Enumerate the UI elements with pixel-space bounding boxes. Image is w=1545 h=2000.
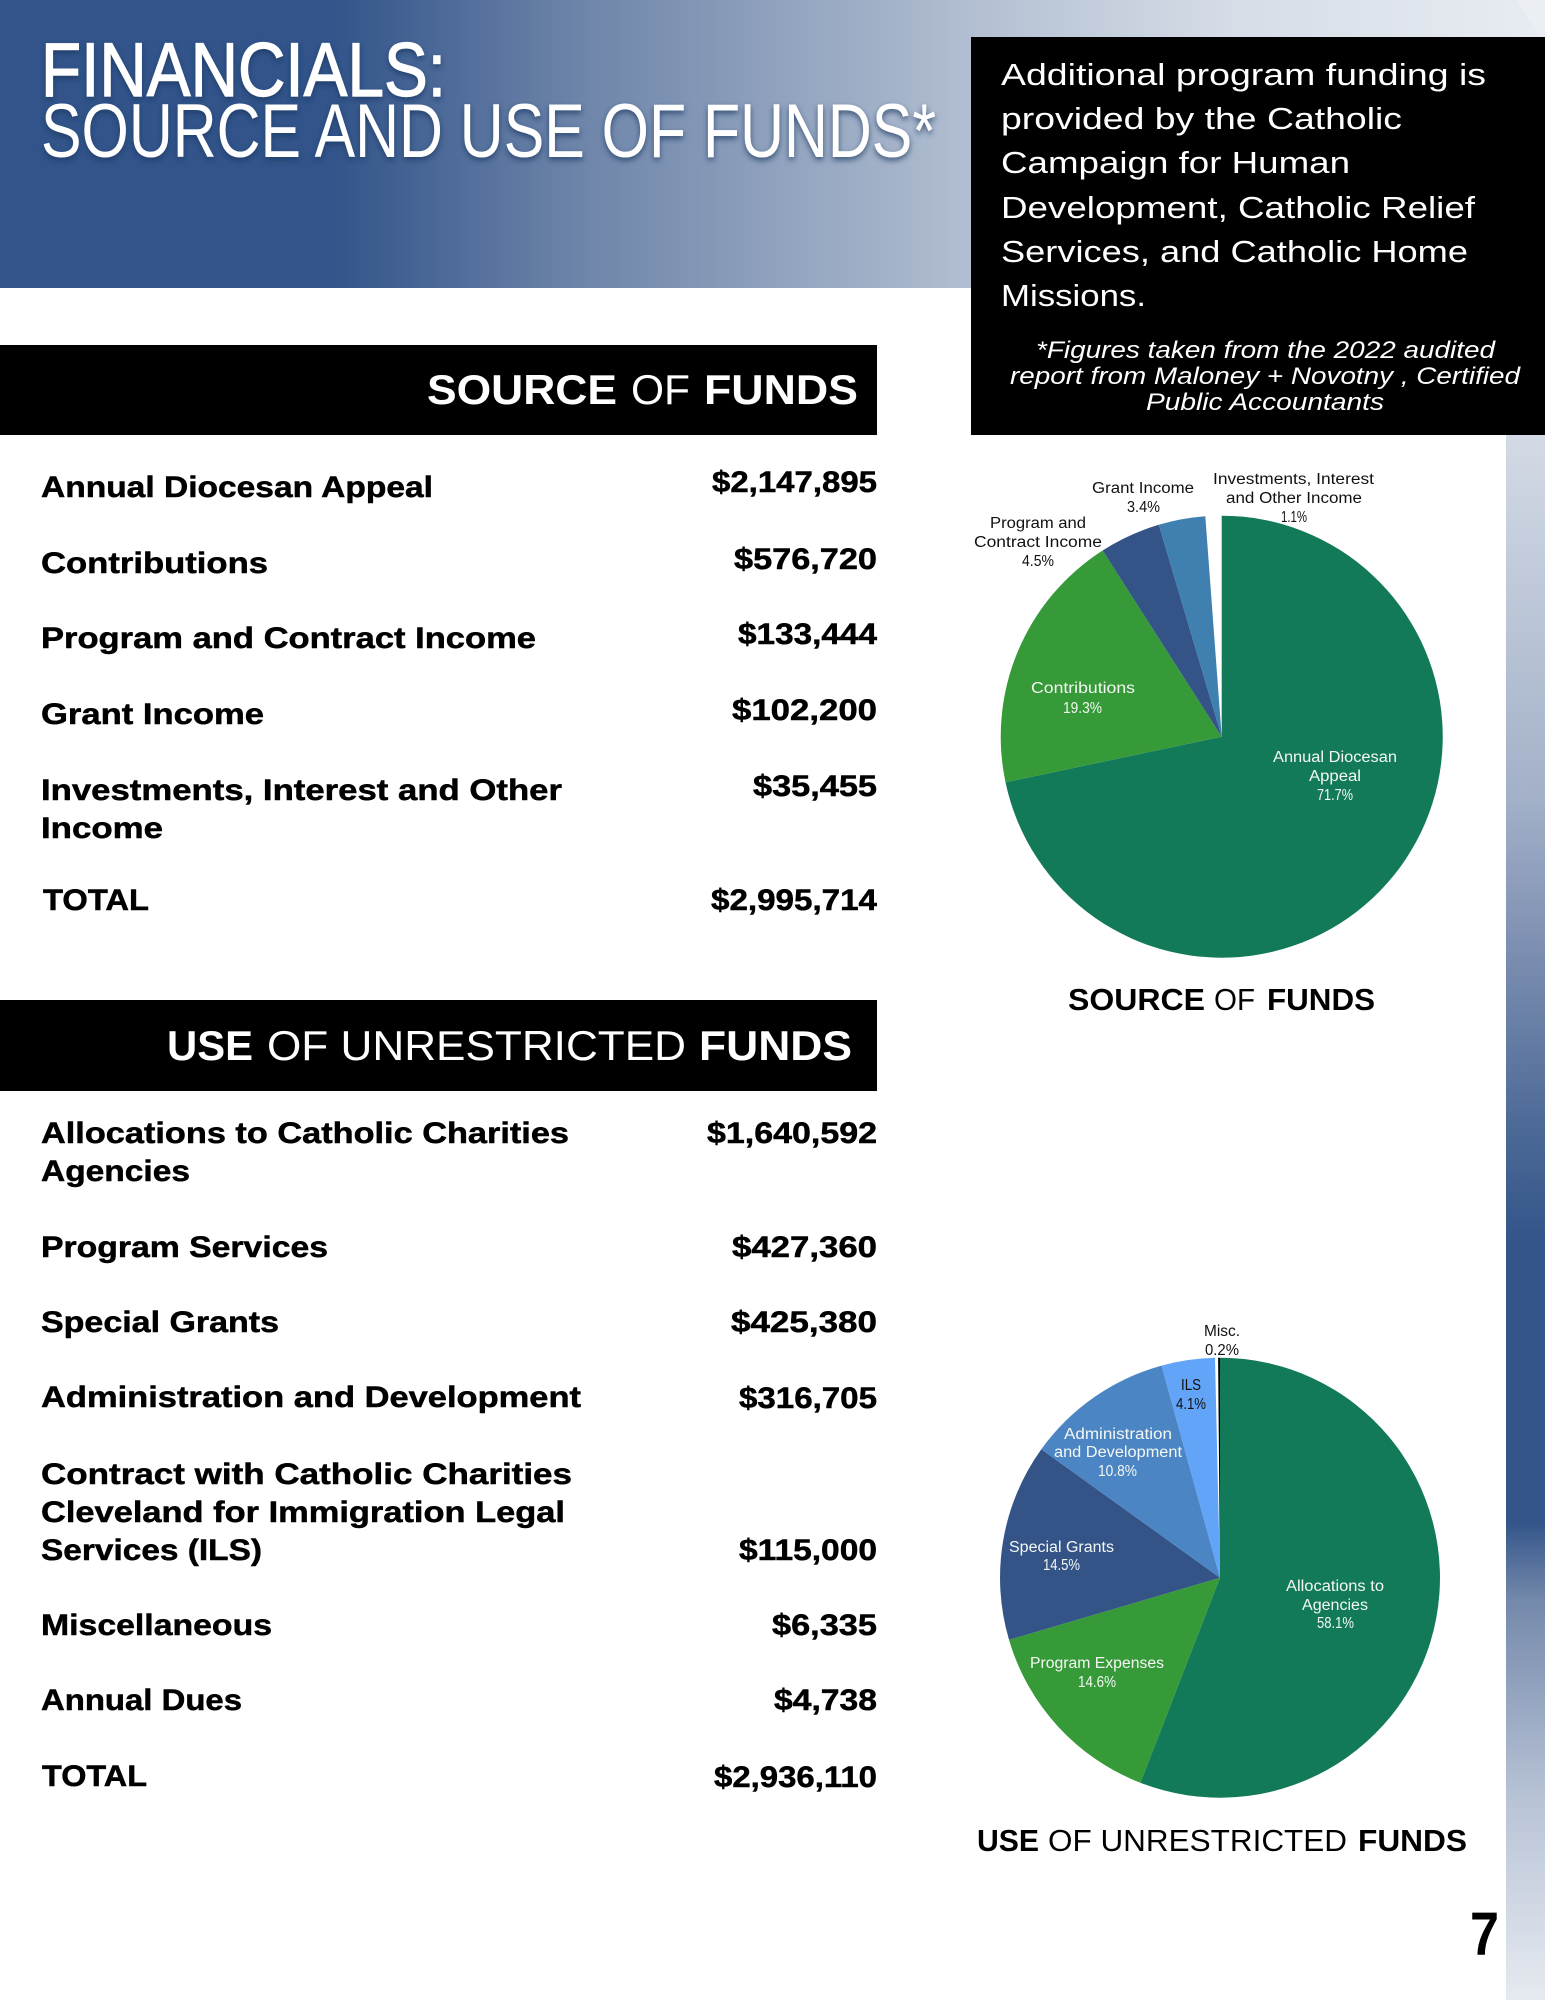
note body text: Development, Catholic Relief [1001, 190, 1475, 225]
footnote [1010, 337, 1521, 416]
table: use of unrestricted funds: Special Grants [41, 1306, 279, 1339]
pie labels light: 14.6% [1078, 1674, 1116, 1691]
table: use of unrestricted funds: Administration and Development [41, 1381, 581, 1414]
top banner gradient [0, 0, 1545, 288]
note body text: provided by the Catholic [1001, 101, 1402, 136]
panel: source of funds header: OF [631, 366, 690, 413]
table: source of funds: Income [41, 812, 163, 845]
note body text [1001, 57, 1486, 313]
note body text: Services, and Catholic Home [1001, 234, 1468, 269]
table: source of funds: $2,147,895 [712, 466, 877, 499]
pie chart: use of unrestricted funds [1000, 1323, 1440, 1798]
table: use of unrestricted funds: Annual Dues [41, 1684, 242, 1717]
table: source of funds: $102,200 [732, 694, 877, 727]
table: use of unrestricted funds: $1,640,592 [707, 1117, 877, 1150]
right gradient strip [1506, 435, 1545, 2000]
pie labels light: Agencies [1302, 1597, 1368, 1614]
pie labels outside: 1.1% [1281, 509, 1307, 526]
pie labels light: and Development [1054, 1444, 1183, 1461]
table: use of unrestricted funds: $115,000 [739, 1534, 877, 1567]
note body text: Additional program funding is [1001, 57, 1486, 92]
table: source of funds [41, 466, 877, 917]
footnote: *Figures taken from the 2022 audited [1036, 337, 1496, 364]
caption: use of unrestricted funds [977, 1823, 1467, 1858]
footnote: report from Maloney + Novotny , Certified [1010, 363, 1521, 390]
pie labels inside: 71.7% [1317, 787, 1353, 804]
pie labels outside: Contract Income [974, 534, 1102, 551]
pie labels light: Allocations to [1286, 1578, 1384, 1595]
title: SOURCE AND USE OF FUNDS* [41, 89, 936, 174]
table: use of unrestricted funds: $316,705 [739, 1382, 877, 1415]
table: use of unrestricted funds: $427,360 [732, 1231, 877, 1264]
table: use of unrestricted funds: $6,335 [772, 1609, 877, 1642]
table: use of unrestricted funds: Program Services [41, 1231, 328, 1264]
caption: use of unrestricted funds: USE [977, 1823, 1039, 1858]
pie chart: source of funds [974, 471, 1443, 958]
pie labels light: Administration [1064, 1426, 1172, 1443]
pie labels outside: and Other Income [1226, 490, 1362, 507]
caption: source of funds: OF [1214, 982, 1255, 1017]
title: FINANCIALS: [41, 28, 446, 113]
caption: source of funds: FUNDS [1267, 982, 1375, 1017]
table: use of unrestricted funds: Agencies [41, 1155, 190, 1188]
table: use of unrestricted funds: $4,738 [774, 1684, 877, 1717]
table: use of unrestricted funds: Services (ILS) [41, 1534, 262, 1567]
title [41, 28, 936, 174]
panel: use of unrestricted funds header: FUNDS [699, 1022, 852, 1069]
table: source of funds: $576,720 [734, 543, 877, 576]
pie labels light: Program Expenses [1030, 1655, 1164, 1672]
table: use of unrestricted funds: $2,936,110 [714, 1761, 877, 1794]
table: use of unrestricted funds: Allocations to Catholic Charities [41, 1117, 569, 1150]
page number: 7 [1470, 1900, 1499, 1968]
caption: source of funds [1068, 982, 1375, 1017]
table: source of funds: $2,995,714 [711, 884, 877, 917]
pie labels inside [1031, 680, 1397, 804]
note body text: Campaign for Human [1001, 145, 1350, 180]
pie labels inside: 19.3% [1063, 700, 1102, 717]
pie labels light: 10.8% [1098, 1463, 1137, 1480]
pie labels inside: Appeal [1309, 768, 1361, 785]
pie labels inside: Annual Diocesan [1273, 749, 1397, 766]
pie labels light [1009, 1426, 1384, 1691]
table: source of funds: Investments, Interest and Other [41, 774, 562, 807]
note body text: Missions. [1001, 278, 1146, 313]
table: use of unrestricted funds: Miscellaneous [41, 1609, 272, 1642]
caption: use of unrestricted funds: OF UNRESTRICTED [1048, 1823, 1347, 1858]
panel: additional funding note [971, 37, 1545, 435]
pie labels inside: Contributions [1031, 680, 1135, 697]
pie labels dark: 0.2% [1205, 1342, 1239, 1359]
table: source of funds: TOTAL [43, 884, 149, 917]
pie labels light: 14.5% [1043, 1557, 1080, 1574]
panel: source of funds header: FUNDS [704, 366, 858, 413]
pie labels outside: 4.5% [1022, 553, 1054, 570]
panel: use of unrestricted funds header [0, 1000, 877, 1091]
table: source of funds: Grant Income [41, 698, 264, 731]
panel: use of unrestricted funds header: USE [167, 1022, 253, 1069]
pie labels dark: 4.1% [1176, 1396, 1206, 1413]
pie labels outside [974, 471, 1375, 570]
table: use of unrestricted funds [41, 1117, 877, 1794]
pie labels dark [1176, 1323, 1240, 1413]
table: use of unrestricted funds: TOTAL [42, 1760, 147, 1793]
table: source of funds: $133,444 [738, 618, 877, 651]
pie labels light: 58.1% [1317, 1615, 1354, 1632]
pie labels outside: Grant Income [1092, 480, 1194, 497]
panel: source of funds header: SOURCE [427, 366, 617, 413]
table: source of funds: Program and Contract Income [41, 622, 536, 655]
pie labels outside: Investments, Interest [1213, 471, 1375, 488]
table: use of unrestricted funds: $425,380 [731, 1306, 877, 1339]
pie labels light: Special Grants [1009, 1539, 1114, 1556]
caption: source of funds: SOURCE [1068, 982, 1205, 1017]
table: source of funds: $35,455 [753, 770, 877, 803]
pie labels dark: Misc. [1204, 1323, 1240, 1340]
pie labels outside: Program and [990, 515, 1086, 532]
table: source of funds: Annual Diocesan Appeal [41, 471, 433, 504]
pie labels outside: 3.4% [1127, 499, 1160, 516]
pie labels dark: ILS [1181, 1377, 1201, 1394]
caption: use of unrestricted funds: FUNDS [1358, 1823, 1467, 1858]
panel: use of unrestricted funds header: OF UNRESTRICTED [267, 1022, 686, 1069]
table: use of unrestricted funds: Cleveland for Immigration Legal [41, 1496, 565, 1529]
footnote: Public Accountants [1146, 389, 1384, 416]
table: use of unrestricted funds: Contract with Catholic Charities [41, 1458, 572, 1491]
table: source of funds: Contributions [41, 547, 268, 580]
panel: source of funds header [0, 345, 877, 435]
